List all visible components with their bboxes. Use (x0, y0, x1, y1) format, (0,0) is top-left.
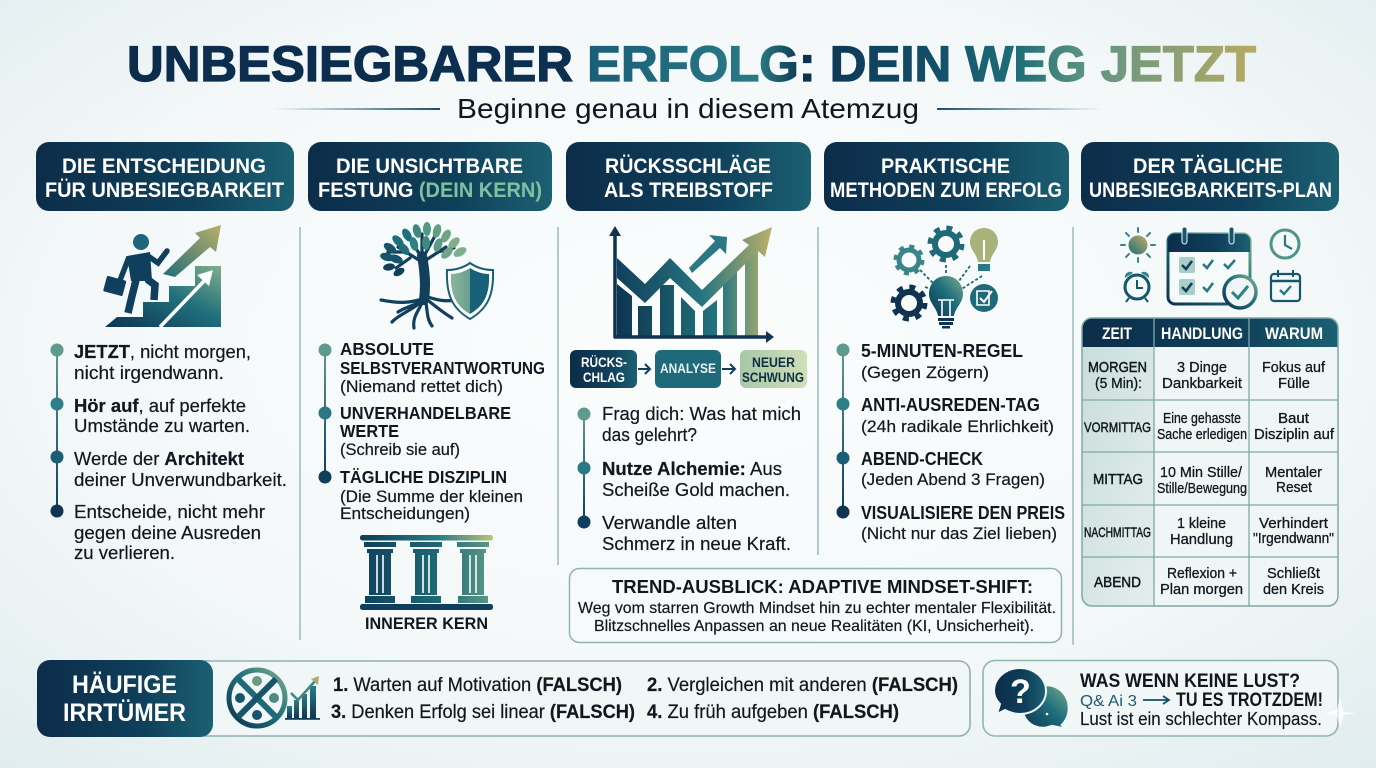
table row: Abend (1094, 566, 1324, 598)
heading: Rückschläge (566, 142, 811, 211)
flow diagram: Rückschlag to neuer Schwung (570, 350, 807, 388)
heading: häufige Irrtümer: IRRTÜMER (63, 698, 186, 727)
subtitle: Beginne genau in diesem Atemzug (457, 93, 919, 124)
table row: Nachmittag: Verhindert (1259, 516, 1328, 532)
table row: Abend: den Kreis (1263, 582, 1324, 598)
icon: tree and shield (379, 222, 493, 328)
icon: person climbing stairs (103, 225, 221, 327)
sparkle (1324, 696, 1358, 728)
table row: Abend: Reflexion + (1167, 566, 1237, 582)
text block: methods: ABEND-CHECK (861, 449, 983, 469)
icon: clock (1271, 230, 1299, 258)
table row: Mittag: Reset (1276, 480, 1312, 496)
heading: täglicher Plan: UNBESIEGBARKEITS-PLAN (1089, 179, 1332, 202)
text block: lessons: Schmerz in neue Kraft. (602, 534, 791, 554)
text block: misconceptions (331, 675, 958, 723)
text block: core values: SELBSTVERANTWORTUNG (340, 358, 545, 378)
panel: Rückschläge (566, 142, 811, 554)
timeline bullets (836, 344, 850, 518)
table row: Vormittag: Eine gehasste (1163, 411, 1241, 427)
heading: häufige Irrtümer (37, 660, 213, 737)
table row: Nachmittag (1084, 516, 1334, 548)
flow diagram: Rückschlag to neuer Schwung: ANALYSE (660, 361, 716, 376)
heading: häufige Irrtümer: HÄUFIGE (72, 671, 177, 699)
callout: Trend-Ausblick (570, 568, 1062, 642)
table row: Morgen: Fülle (1278, 376, 1310, 392)
table row: Nachmittag: NACHMITTAG (1084, 524, 1151, 540)
text block: core values: Entscheidungen) (340, 505, 470, 523)
text block: core values: (Schreib sie auf) (340, 441, 460, 459)
table row: Nachmittag: Handlung (1170, 532, 1233, 548)
label: innerer Kern: INNERER KERN (365, 614, 488, 633)
text block: bullet list: Werde der Architekt (74, 449, 244, 469)
text block: lessons: Frag dich: Was hat mich (602, 404, 801, 424)
text block: core values: TÄGLICHE DISZIPLIN (340, 467, 507, 487)
heading: die unsichtbare Festung: DIE UNSICHTBARE (336, 155, 523, 178)
table row: Morgen: MORGEN (1088, 360, 1147, 376)
table row: Nachmittag: "Irgendwann" (1253, 531, 1334, 547)
table row: Mittag: MITTAG (1093, 472, 1143, 488)
heading: die Entscheidung: FÜR UNBESIEGBARKEIT (45, 179, 284, 202)
timeline bullets (578, 408, 590, 528)
heading: täglicher Plan: DER TÄGLICHE (1133, 155, 1283, 178)
heading: Rückschläge: ALS TREIBSTOFF (604, 179, 773, 202)
text block: lessons: Verwandle alten (602, 513, 737, 533)
text block: misconceptions: 3. Denken Erfolg sei linear (FALSCH) (331, 702, 635, 723)
text block: misconceptions: 4. Zu früh aufgeben (FALSCH) (647, 702, 899, 723)
table row: Abend: ABEND (1094, 575, 1141, 591)
column dividers (300, 227, 1073, 645)
text block: lessons: Scheiße Gold machen. (602, 480, 790, 500)
text block: core values: (Die Summe der kleinen (340, 488, 523, 506)
panel: die Entscheidung (36, 142, 294, 563)
flow diagram: Rückschlag to neuer Schwung: SCHWUNG (742, 370, 804, 385)
table row: Abend: Plan morgen (1160, 582, 1243, 598)
text block: methods: 5-MINUTEN-REGEL (861, 341, 1023, 361)
panel: häufige Irrtümer (37, 660, 970, 737)
title: UNBESIEGBARER ERFOLG: DEIN WEG JETZT (127, 36, 1256, 92)
table: daily plan (1082, 318, 1338, 606)
text block: core values (340, 339, 545, 523)
icon: pillars (360, 535, 493, 610)
text block: bullet list: JETZT, nicht morgen, (74, 342, 251, 362)
text block: core values: UNVERHANDELBARE (340, 403, 511, 423)
table header: HANDLUNG (1161, 324, 1243, 343)
flow diagram: Rückschlag to neuer Schwung: RÜCKS- (581, 355, 627, 370)
flow diagram: Rückschlag to neuer Schwung: NEUER (752, 355, 795, 370)
icon: question speech bubbles (994, 668, 1069, 729)
icon: gears and light bulbs (893, 228, 998, 328)
heading: täglicher Plan (1081, 142, 1339, 211)
heading: die unsichtbare Festung (308, 142, 552, 211)
heading: praktische Methoden (824, 142, 1069, 211)
text block: core values: WERTE (340, 421, 399, 441)
table header: ZEIT (1102, 324, 1132, 343)
heading: praktische Methoden: PRAKTISCHE (881, 155, 1010, 178)
text block: core values: ABSOLUTE (340, 339, 434, 359)
text block: methods: VISUALISIERE DEN PREIS (861, 503, 1065, 523)
text block: bullet list: Hör auf, auf perfekte (74, 396, 246, 416)
text block: methods: ANTI-AUSREDEN-TAG (861, 395, 1040, 415)
text block: answer: Q& Ai 3 (1080, 693, 1137, 710)
text block: core values: (Niemand rettet dich) (340, 378, 503, 396)
icon: alarm clock (1125, 272, 1149, 302)
table row: Mittag: Stille/Bewegung (1157, 481, 1247, 497)
text block: misconceptions: 1. Warten auf Motivation (FALSCH) (333, 675, 622, 696)
text block: misconceptions: 2. Vergleichen mit anderen (FALSCH) (647, 675, 958, 696)
table row: Vormittag: VORMITTAG (1084, 419, 1151, 435)
table row: Morgen: Fokus auf (1262, 360, 1326, 376)
flow diagram: Rückschlag to neuer Schwung: CHLAG (583, 370, 625, 385)
table row: Morgen (1088, 360, 1326, 392)
table row: Mittag (1093, 465, 1322, 497)
icon: question speech bubbles: ? (1010, 673, 1031, 711)
table row: Vormittag: Baut (1278, 411, 1309, 427)
table row: Vormittag (1084, 411, 1335, 443)
table row: Abend: Schließt (1267, 566, 1320, 582)
text block: answer: WAS WENN KEINE LUST? (1080, 671, 1300, 692)
table row: Nachmittag: 1 kleine (1177, 516, 1226, 532)
table row: Morgen: 3 Dinge (1177, 360, 1227, 376)
callout: Trend-Ausblick: Blitzschnelles Anpassen an neue Realitäten (KI, Unsicherheit). (594, 618, 1034, 635)
table row: Mittag: 10 Min Stille/ (1160, 465, 1243, 481)
panel: was wenn keine Lust (983, 660, 1338, 736)
text block: bullet list: deiner Unverwundbarkeit. (74, 470, 287, 490)
icon: crossed-out circle and growth chart (229, 670, 320, 726)
heading: die unsichtbare Festung: FESTUNG (DEIN KERN) (318, 179, 542, 202)
panel: täglicher Plan (1081, 142, 1339, 606)
table header: WARUM (1265, 324, 1323, 343)
callout: Trend-Ausblick: TREND-AUSBLICK: ADAPTIVE MINDSET-SHIFT: (612, 577, 1033, 597)
heading: die Entscheidung (36, 142, 294, 211)
panel: praktische Methoden (824, 142, 1069, 543)
callout: Trend-Ausblick: Weg vom starren Growth Mindset hin zu echter mentaler Flexibilität. (578, 600, 1056, 617)
text block: bullet list: Umstände zu warten. (74, 416, 250, 436)
heading: Rückschläge: RÜCKSSCHLÄGE (605, 155, 771, 178)
icon: sun (1121, 228, 1155, 262)
text block: bullet list: nicht irgendwann. (74, 363, 224, 383)
text block: lessons: Nutze Alchemie: Aus (602, 459, 782, 479)
chart: rising zigzag with bars (609, 226, 774, 343)
timeline bullets (50, 344, 64, 518)
panel: die unsichtbare Festung (308, 142, 552, 633)
text block: methods: (Nicht nur das Ziel lieben) (861, 524, 1057, 543)
text block: methods: (Jeden Abend 3 Fragen) (861, 470, 1045, 489)
text block: answer (1080, 671, 1323, 729)
icon: small calendar (1271, 270, 1300, 301)
text block: answer: TU ES TROTZDEM! (1176, 690, 1323, 711)
table row: Morgen: (5 Min): (1095, 376, 1142, 392)
text block: lessons: das gelehrt? (602, 425, 697, 445)
text block: bullet list (74, 342, 287, 563)
table row: Morgen: Dankbarkeit (1162, 376, 1242, 392)
table row: Vormittag: Sache erledigen (1157, 427, 1247, 443)
timeline bullets (318, 344, 332, 484)
table row: Vormittag: Disziplin auf (1254, 427, 1335, 443)
text block: methods: (24h radikale Ehrlichkeit) (861, 417, 1054, 436)
text block: methods: (Gegen Zögern) (861, 363, 989, 382)
heading: praktische Methoden: METHODEN ZUM ERFOLG (830, 179, 1062, 202)
icon: calendar with checks (1168, 227, 1256, 308)
text block: bullet list: Entscheide, nicht mehr (74, 502, 265, 522)
heading: die Entscheidung: DIE ENTSCHEIDUNG (62, 155, 266, 178)
text block: bullet list: gegen deine Ausreden (74, 523, 261, 543)
text block: methods (861, 341, 1065, 543)
table header (1102, 324, 1323, 343)
text block: lessons (602, 404, 801, 554)
text block: bullet list: zu verlieren. (74, 543, 175, 563)
table row: Mittag: Mentaler (1265, 465, 1322, 481)
text block: answer: Lust ist ein schlechter Kompass. (1080, 709, 1322, 729)
